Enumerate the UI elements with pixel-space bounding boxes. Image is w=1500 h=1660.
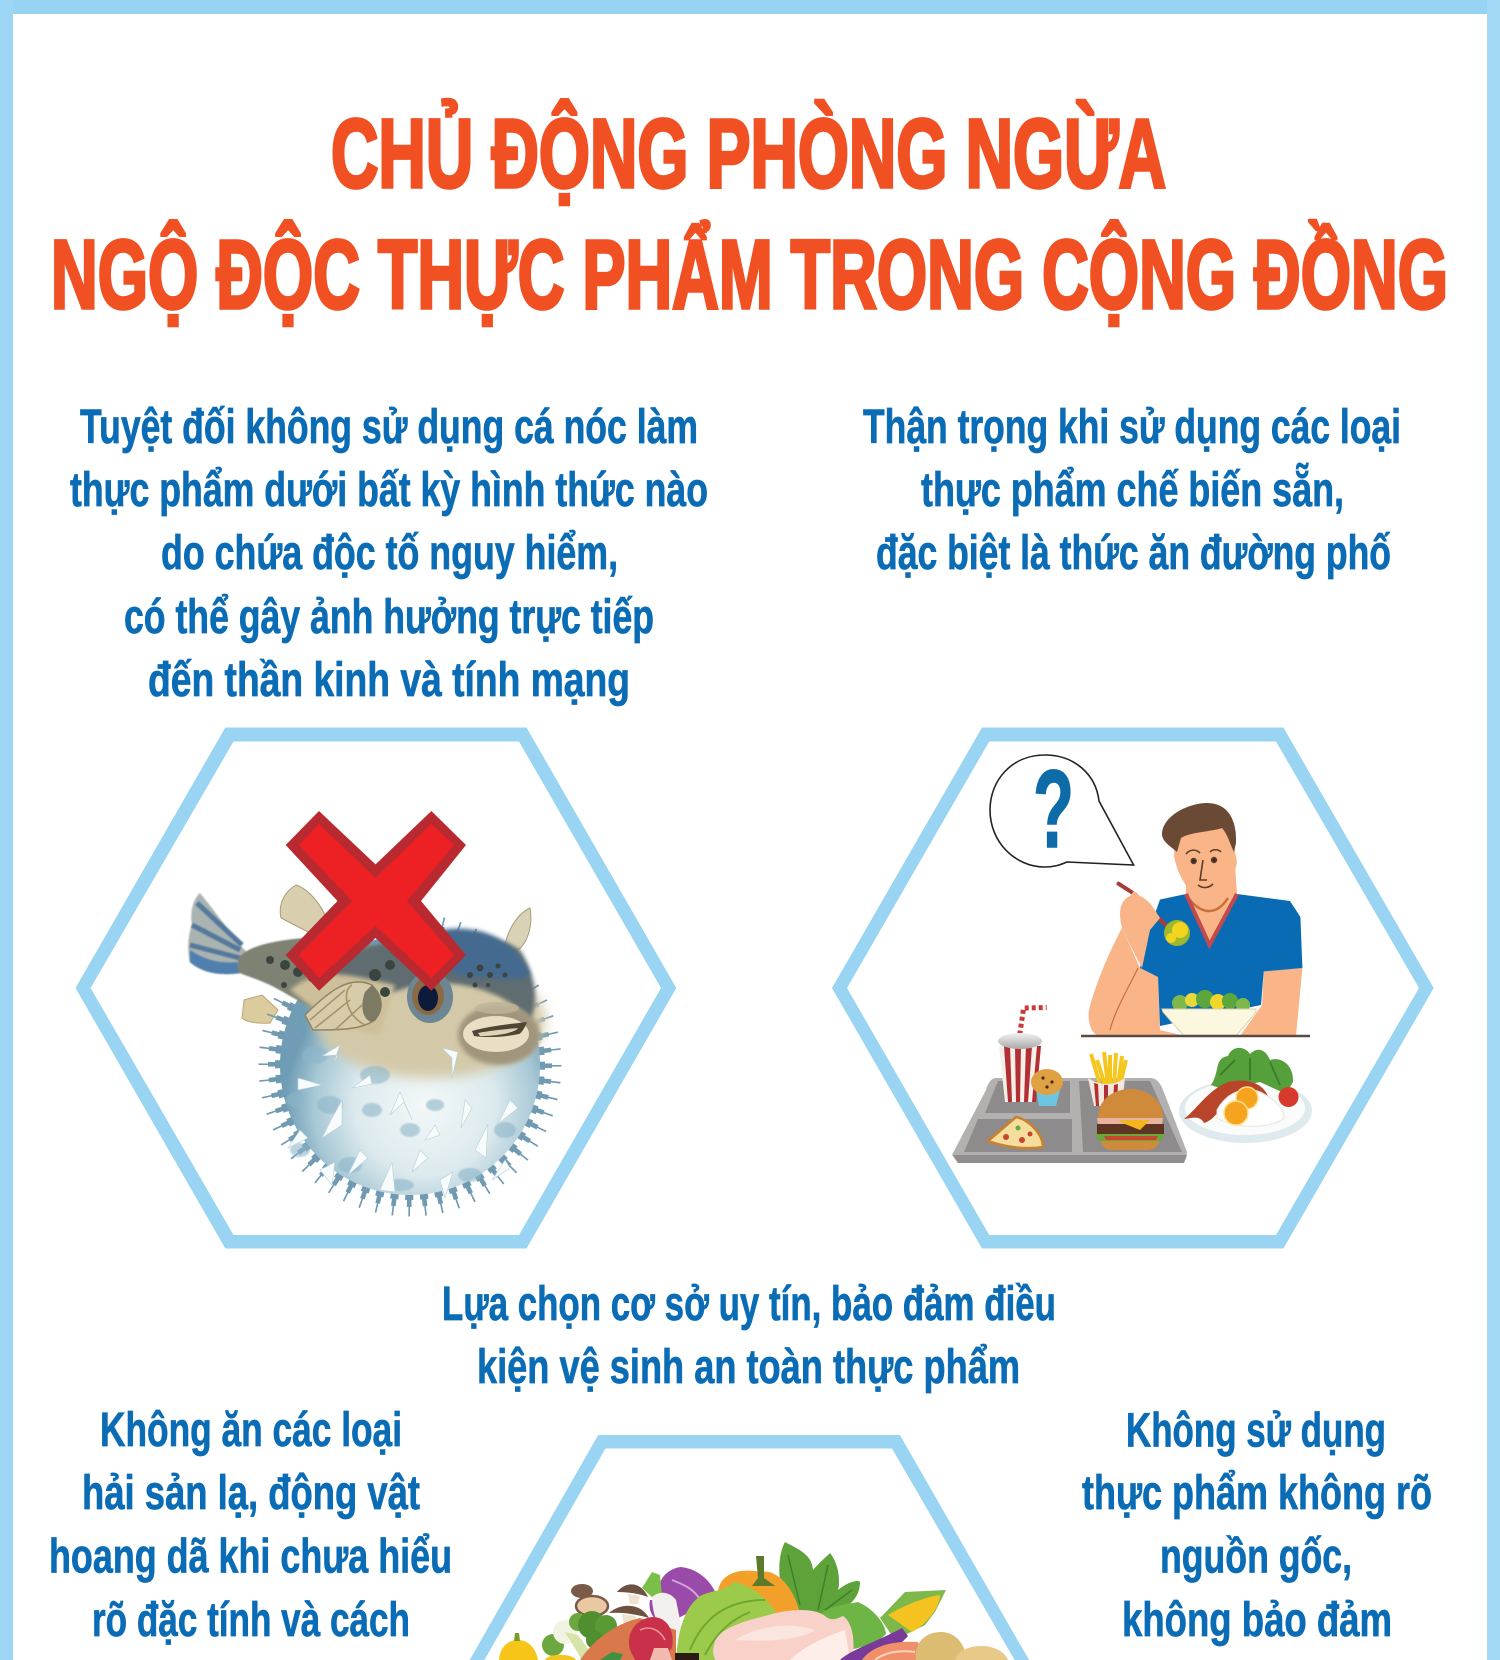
text block: unfamiliar seafood warning — [49, 1404, 452, 1647]
text block: unfamiliar seafood warning: rõ đặc tính và cách — [92, 1594, 410, 1647]
text block: unknown origin warning: không bảo đảm — [1122, 1594, 1392, 1647]
fish body — [280, 935, 540, 1195]
fries — [1088, 1052, 1126, 1106]
salmon — [862, 1642, 925, 1660]
ham and red meat — [580, 1617, 676, 1660]
fork and hand — [1118, 884, 1190, 968]
fish spots — [266, 956, 508, 997]
text block: unknown origin warning: Không sử dụng — [1126, 1404, 1386, 1458]
breakfast plate — [1179, 1048, 1312, 1143]
pumpkin — [718, 1556, 800, 1625]
text block: pufferfish warning: đến thần kinh và tính mạng — [148, 654, 630, 707]
icon: speech bubble: ? — [1033, 748, 1074, 871]
red X mark — [286, 811, 466, 991]
yellow kernels — [545, 1655, 576, 1660]
text block: choose reputable vendors: kiện vệ sinh an toàn thực phẩm — [477, 1341, 1020, 1394]
fish lower fin — [242, 995, 278, 1023]
fish tail — [188, 893, 252, 974]
potatoes — [916, 1632, 966, 1660]
tray — [952, 1078, 1187, 1163]
man arms — [1240, 968, 1302, 1036]
corn — [880, 1590, 946, 1640]
right lettuce — [819, 1602, 886, 1650]
text block: unfamiliar seafood warning: Không ăn các loại — [100, 1404, 402, 1457]
icon: food tray — [952, 1008, 1312, 1163]
icon: pufferfish — [188, 811, 549, 1204]
man face — [1174, 826, 1237, 899]
fish mouth — [458, 1002, 540, 1065]
fish head colouring — [290, 928, 545, 1078]
text block: pufferfish warning: do chứa độc tố nguy hiểm, — [161, 527, 618, 580]
man hair — [1162, 803, 1236, 852]
mushrooms — [571, 1584, 649, 1625]
fish white spines — [288, 1045, 518, 1198]
text block: unknown origin warning — [1082, 1404, 1432, 1647]
purple cabbage — [650, 1567, 717, 1625]
salad bowl — [1162, 990, 1256, 1036]
fish pectoral fin — [305, 982, 382, 1030]
text block: choose reputable vendors — [442, 1278, 1056, 1394]
drink cup — [998, 1008, 1047, 1102]
text block: pufferfish warning: thực phẩm dưới bất kỳ hình thức nào — [70, 464, 708, 517]
fish right fin — [503, 908, 531, 956]
muffin — [1031, 1069, 1063, 1106]
man collar — [1186, 894, 1237, 945]
text block: pufferfish warning: Tuyệt đối không sử dụng cá nóc làm — [80, 401, 698, 454]
burger — [1095, 1089, 1165, 1150]
panel: pufferfish hexagon — [76, 728, 676, 1248]
fish top fin — [280, 885, 325, 934]
fish tail stalk — [238, 937, 400, 1030]
hexagon frame — [470, 1435, 1029, 1660]
panel: fresh food hexagon — [470, 1435, 1029, 1660]
title — [51, 99, 1448, 329]
green herbs — [600, 1652, 623, 1660]
table line — [1081, 1035, 1310, 1037]
fish spikes — [271, 926, 549, 1204]
text block: unknown origin warning: nguồn gốc, — [1160, 1530, 1352, 1584]
panel: street food hexagon — [832, 728, 1434, 1248]
man neck — [1186, 865, 1237, 945]
fish pale blue patches — [286, 1046, 516, 1191]
man facial features — [1186, 850, 1221, 888]
text block: unfamiliar seafood warning: hoang dã khi chưa hiểu — [49, 1530, 452, 1584]
tray compartments — [964, 1081, 1182, 1152]
fish eye — [407, 971, 453, 1023]
eggplant — [840, 1628, 908, 1660]
text block: processed food caution: thực phẩm chế biến sẵn, — [921, 462, 1344, 517]
hexagon frame — [76, 728, 676, 1248]
pizza slice — [988, 1117, 1043, 1148]
text block: processed food caution — [863, 401, 1401, 580]
dark item — [675, 1653, 699, 1660]
chicken — [713, 1610, 854, 1660]
yellow pepper — [499, 1633, 538, 1660]
text block: unfamiliar seafood warning: hải sản lạ, động vật — [82, 1467, 420, 1520]
icon: pile of fresh food — [499, 1542, 1008, 1660]
icon: man eating — [1081, 803, 1310, 1036]
green radish top — [642, 1572, 662, 1597]
broccoli — [542, 1611, 617, 1660]
text block: choose reputable vendors: Lựa chọn cơ sở uy tín, bảo đảm điều — [442, 1278, 1056, 1331]
text block: pufferfish warning: có thể gây ảnh hưởng trực tiếp — [124, 591, 654, 644]
man shirt — [1140, 894, 1302, 1026]
text block: pufferfish warning — [70, 401, 708, 707]
spinach leaves — [779, 1542, 860, 1625]
hexagon frame — [832, 728, 1434, 1248]
icon: speech bubble — [990, 748, 1134, 871]
daikon — [652, 1593, 684, 1642]
lettuce — [676, 1582, 776, 1660]
